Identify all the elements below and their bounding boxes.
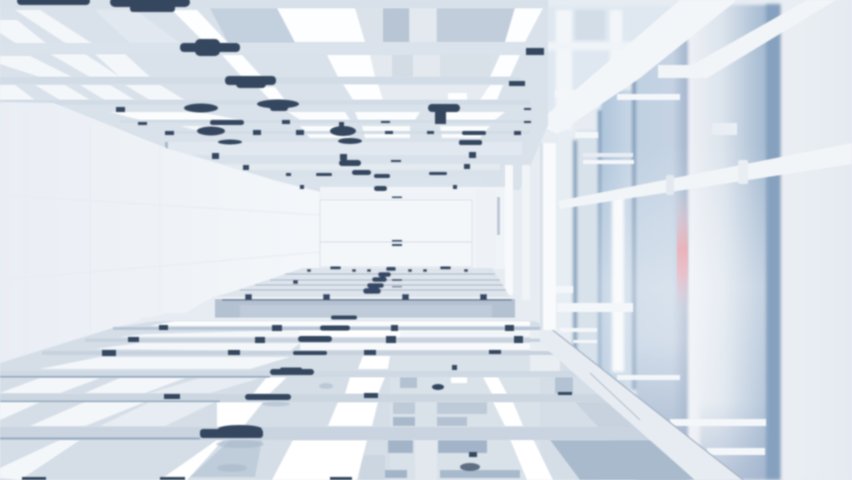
panel: far server racks <box>215 196 515 318</box>
ceiling pipes over the end <box>505 165 513 295</box>
icon: ceiling and floor fixtures <box>17 0 572 480</box>
panel: ceiling <box>0 0 548 192</box>
panel: raised floor <box>0 319 743 480</box>
panel: right side pillars <box>556 0 852 480</box>
icon: rack fixtures <box>245 196 487 300</box>
ceiling light strips <box>172 8 543 100</box>
panel: end wall <box>320 165 530 300</box>
panel: floor beams <box>0 318 660 440</box>
panel: left white wall <box>0 102 320 363</box>
floor light strips <box>160 356 553 480</box>
panel: upper diagonal struts <box>536 0 836 134</box>
floor shadows under fixtures <box>216 383 333 472</box>
panel: diagonal pipe <box>558 143 852 209</box>
panel: upper right glazing behind struts <box>540 6 690 130</box>
panel: ceiling beams <box>0 0 548 187</box>
floor tiles <box>190 377 520 480</box>
panel: glass frame edge <box>540 143 743 480</box>
red glow on pillar <box>677 195 688 315</box>
glass and pipes near the frame <box>550 440 695 480</box>
panel: lateral rails <box>555 90 766 455</box>
